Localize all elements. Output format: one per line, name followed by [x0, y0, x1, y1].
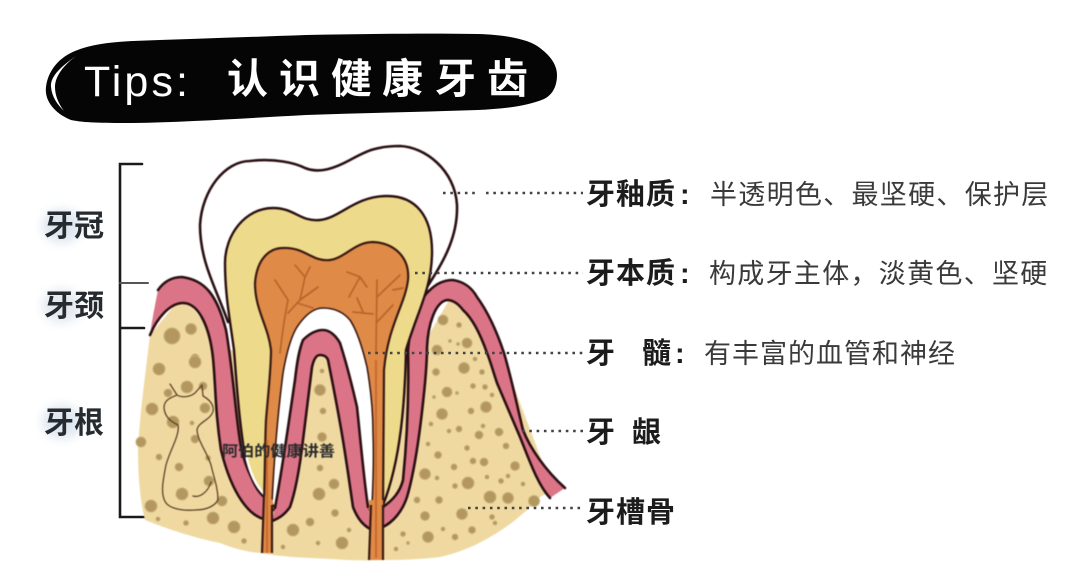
dentin — [225, 196, 432, 505]
central bone pores — [281, 369, 351, 549]
cat doodle — [163, 384, 218, 510]
label: alveolar bone: 牙槽骨 — [586, 496, 675, 529]
nerve canals — [262, 360, 383, 560]
bracket — [120, 164, 148, 517]
left gum — [150, 277, 268, 520]
pulp chamber — [255, 242, 408, 510]
label: pulp: 牙髓: — [586, 337, 685, 370]
side labels: tooth regions: 牙颈 — [44, 290, 104, 323]
label: pulp — [586, 337, 956, 370]
white root sliver — [245, 450, 264, 494]
blood vessels — [275, 265, 403, 353]
title banner — [46, 34, 557, 123]
central gum arch — [272, 330, 372, 531]
side labels: tooth regions: 牙根 — [44, 407, 104, 440]
label: dentin: 构成牙主体，淡黄色、坚硬 — [709, 259, 1049, 289]
side labels: tooth regions — [42, 209, 104, 440]
title banner: Tips: — [84, 58, 188, 106]
label: enamel: 半透明色、最坚硬、保护层 — [710, 180, 1050, 210]
enamel — [200, 146, 457, 322]
label: enamel: 牙釉质: — [586, 178, 690, 211]
label: dentin: 牙本质: — [586, 257, 690, 290]
label: pulp: 有丰富的血管和神经 — [704, 339, 956, 369]
right gum — [383, 280, 565, 527]
bone pores — [136, 315, 540, 551]
watermark: 阿伯的健康讲善 — [222, 442, 335, 460]
central bone — [272, 355, 372, 559]
title banner: 认识健康牙齿 — [227, 56, 528, 102]
alveolar bone — [138, 295, 553, 560]
label: enamel — [586, 178, 1050, 211]
label: gum: 牙龈 — [586, 416, 661, 449]
white inner arch — [272, 308, 373, 510]
tooth diagram — [136, 146, 565, 560]
side labels: tooth regions: 牙冠 — [44, 210, 104, 243]
label: dentin — [586, 257, 1049, 290]
leader lines — [368, 193, 583, 508]
